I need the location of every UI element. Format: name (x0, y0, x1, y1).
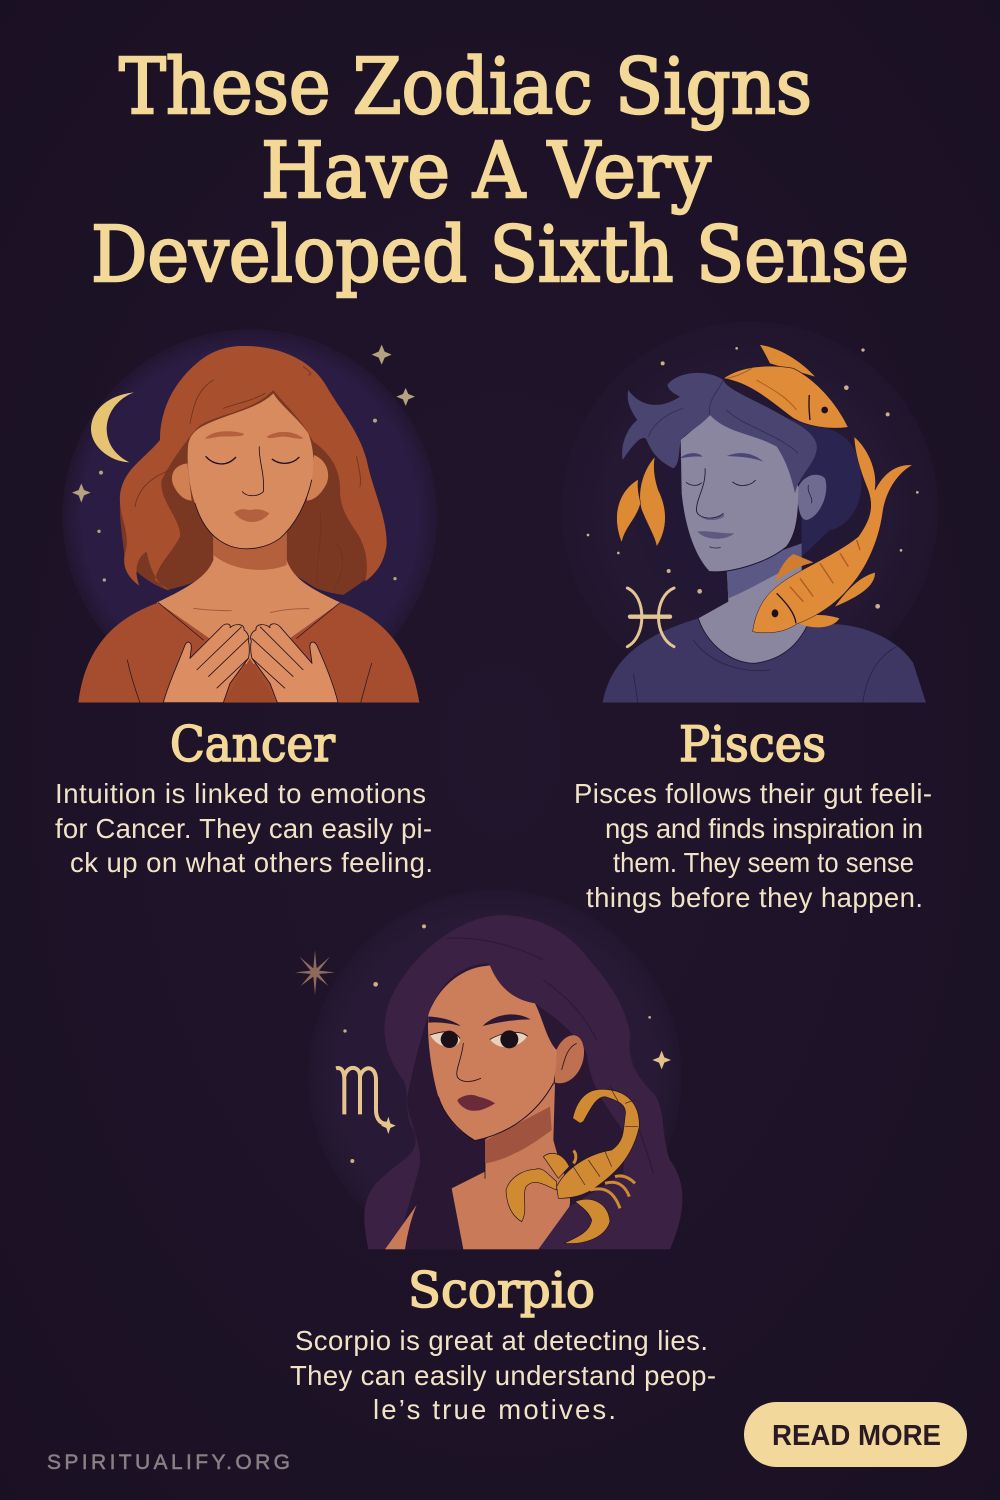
button: read more: READ MORE (772, 1420, 941, 1452)
illustration: Scorpio woman (295, 890, 682, 1263)
text: Scorpio description: Scorpio is great at detecting lies. (295, 1325, 708, 1356)
heading: Pisces: Pisces (679, 716, 826, 773)
text: Cancer description: Intuition is linked to emotions (55, 778, 426, 809)
face (681, 410, 798, 572)
facial features (428, 1014, 531, 1111)
facial features (205, 431, 303, 522)
text: Pisces description (574, 778, 932, 913)
illustration: Pisces man (586, 345, 926, 702)
facial features (680, 453, 763, 548)
ear (555, 1035, 584, 1083)
text: Cancer description (55, 778, 433, 878)
illustration: Cancer woman (63, 329, 437, 704)
face (428, 966, 557, 1141)
heading: Scorpio: Scorpio (408, 1262, 595, 1319)
icon: Scorpio symbol (336, 1068, 396, 1134)
icon: scorpion (506, 1089, 639, 1244)
stars (295, 924, 671, 1163)
hair back (786, 418, 862, 556)
ears (172, 455, 328, 501)
icon: upper fish (723, 345, 848, 428)
shirt (603, 618, 926, 703)
neck and chest (452, 1083, 570, 1249)
text: Pisces description: Pisces follows their gut feeli- (574, 778, 932, 809)
text: Scorpio description: le’s true motives. (373, 1394, 616, 1425)
button: read more (744, 1402, 967, 1467)
hair (364, 915, 682, 1249)
icon: lower fish (753, 437, 913, 633)
shirt (78, 603, 419, 703)
text: Pisces description: them. They seem to sense (613, 847, 914, 878)
title: Have A Very (261, 127, 711, 216)
heading: Cancer: Cancer (170, 716, 336, 773)
text: Scorpio description (290, 1325, 716, 1425)
stars (587, 347, 919, 609)
ear (797, 475, 826, 520)
title: Developed Sixth Sense (91, 211, 909, 300)
icon: sparkle stars (72, 345, 415, 582)
title: These Zodiac Signs (119, 43, 812, 132)
hands (163, 624, 338, 703)
text: Pisces description: things before they happen. (586, 882, 923, 913)
title (91, 43, 909, 300)
text: Pisces description: ngs and finds inspiration in (605, 813, 923, 844)
hair (120, 346, 387, 595)
icon: crescent moon (91, 392, 134, 462)
text: Cancer description: ck up on what others feeling. (70, 847, 433, 878)
face (188, 393, 313, 549)
hair (622, 373, 817, 493)
icon: Pisces symbol (627, 588, 674, 647)
icon: fish tail (617, 457, 665, 547)
neck (698, 563, 807, 663)
footer: site name: SPIRITUALIFY.ORG (47, 1451, 290, 1474)
text: Cancer description: for Cancer. They can easily pi- (55, 813, 432, 844)
neck and chest (156, 532, 340, 664)
text: Scorpio description: They can easily understand peop- (290, 1360, 716, 1391)
